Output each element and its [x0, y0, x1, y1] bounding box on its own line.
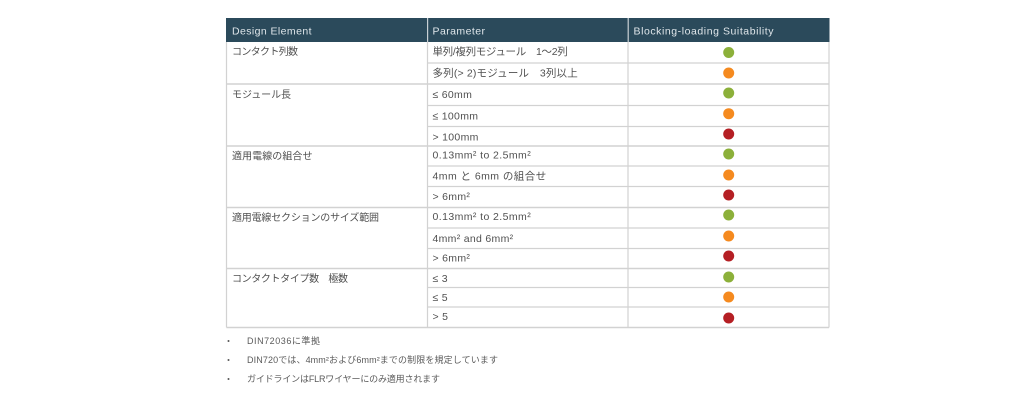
- table header: [226, 18, 830, 42]
- parameter labels: > 6mm²: [432, 252, 470, 264]
- design element labels: コンタクトタイプ数 極数: [232, 272, 348, 285]
- parameter labels: [432, 45, 578, 323]
- design element labels: 適用電線セクションのサイズ範囲: [232, 211, 379, 224]
- parameter labels: > 5: [432, 311, 448, 323]
- footnotes: ガイドラインはFLRワイヤーにのみ適用されます: [247, 373, 440, 384]
- parameter labels: > 6mm²: [432, 191, 470, 203]
- design element labels: モジュール長: [232, 89, 291, 101]
- parameter labels: 多列(> 2)モジュール 3列以上: [432, 66, 578, 80]
- parameter labels: ≤ 100mm: [432, 110, 478, 122]
- table header: Blocking-loading Suitability: [634, 26, 774, 38]
- parameter labels: 単列/複列モジュール 1〜2列: [432, 45, 568, 58]
- design element labels: [232, 45, 379, 285]
- parameter labels: 4mm と 6mm の組合せ: [432, 170, 546, 182]
- table: [226, 18, 830, 328]
- design element labels: 適用電線の組合せ: [232, 150, 312, 162]
- footnotes: [228, 335, 498, 384]
- parameter labels: 0.13mm² to 2.5mm²: [432, 150, 531, 162]
- parameter labels: ≤ 3: [432, 273, 448, 285]
- parameter labels: 4mm² and 6mm²: [432, 233, 514, 245]
- parameter labels: ≤ 5: [432, 292, 448, 304]
- table header: Parameter: [432, 26, 486, 38]
- suitability dots: [723, 47, 734, 324]
- parameter labels: 0.13mm² to 2.5mm²: [432, 211, 531, 223]
- footnotes: DIN720では、4mm²および6mm²までの制限を規定しています: [247, 354, 498, 365]
- footnotes: DIN72036に準拠: [247, 335, 320, 346]
- design element labels: コンタクト列数: [232, 45, 298, 58]
- parameter labels: > 100mm: [432, 132, 479, 144]
- table header: Design Element: [232, 26, 312, 38]
- parameter labels: ≤ 60mm: [432, 89, 472, 101]
